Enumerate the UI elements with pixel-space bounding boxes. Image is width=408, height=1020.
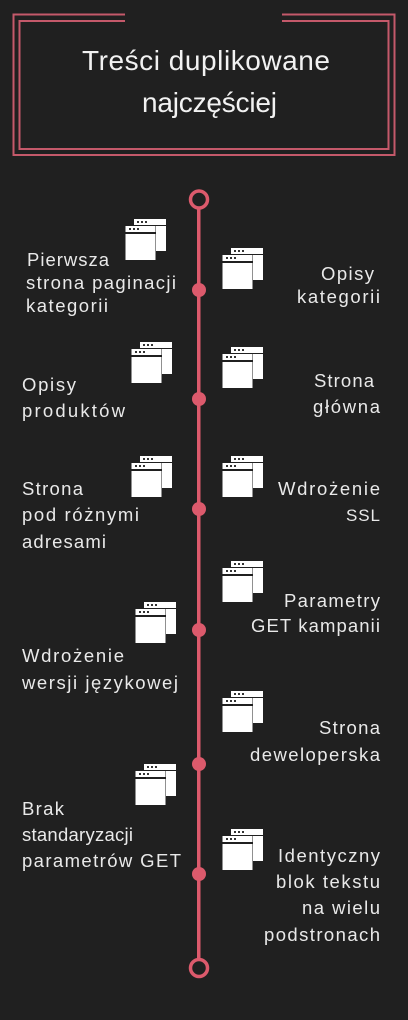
item: Pierwsza strona paginacji kategorii: Pierwsza — [27, 249, 110, 270]
item: Wdrożenie wersji językowej — [21, 602, 178, 693]
item: Opisy kategorii — [222, 248, 380, 307]
item: Opisy produktów: Opisy — [22, 374, 77, 395]
item: Identyczny blok tekstu na wielu podstronach: na wielu — [302, 897, 380, 918]
item: Pierwsza strona paginacji kategorii: strona paginacji — [26, 272, 176, 293]
item: Pierwsza strona paginacji kategorii: kategorii — [26, 295, 108, 316]
item: Strona deweloperska: Strona — [319, 717, 381, 738]
title frame — [14, 14, 394, 155]
item: Strona deweloperska: deweloperska — [250, 744, 381, 765]
item: Parametry GET kampanii — [222, 561, 381, 636]
item: Wdrożenie wersji językowej: wersji językowej — [21, 672, 178, 693]
item: Strona główna — [222, 347, 381, 417]
item: Opisy kategorii: Opisy — [321, 263, 375, 284]
item: Parametry GET kampanii: GET kampanii — [251, 615, 380, 636]
item: Pierwsza strona paginacji kategorii — [26, 219, 176, 316]
item: Wdrożenie SSL: SSL — [346, 506, 380, 525]
item: Strona pod różnymi adresami: adresami — [22, 531, 106, 552]
item: Identyczny blok tekstu na wielu podstronach: Identyczny — [278, 845, 381, 866]
item: Strona główna: główna — [313, 396, 381, 417]
item: Identyczny blok tekstu na wielu podstronach: podstronach — [264, 924, 380, 945]
title — [82, 45, 330, 118]
title: najczęściej — [142, 87, 277, 118]
item: Strona deweloperska — [222, 691, 381, 765]
item: Strona pod różnymi adresami: pod różnymi — [22, 504, 139, 525]
item: Wdrożenie SSL — [222, 456, 380, 525]
item: Identyczny blok tekstu na wielu podstronach — [222, 829, 381, 945]
item: Brak standaryzacji parametrów GET: Brak — [22, 798, 65, 819]
item: Identyczny blok tekstu na wielu podstronach: blok tekstu — [276, 871, 380, 892]
item: Opisy produktów: produktów — [22, 400, 126, 421]
item: Brak standaryzacji parametrów GET: parametrów GET — [22, 850, 181, 871]
item: Strona pod różnymi adresami: Strona — [22, 478, 84, 499]
item: Brak standaryzacji parametrów GET: standaryzacji — [22, 824, 133, 845]
item: Opisy kategorii: kategorii — [297, 286, 380, 307]
timeline — [190, 191, 208, 976]
item: Wdrożenie SSL: Wdrożenie — [278, 478, 380, 499]
item: Wdrożenie wersji językowej: Wdrożenie — [22, 645, 124, 666]
item: Parametry GET kampanii: Parametry — [284, 590, 381, 611]
item: Strona pod różnymi adresami — [22, 456, 172, 552]
item: Strona główna: Strona — [314, 370, 375, 391]
title: Treści duplikowane — [82, 45, 330, 76]
item: Opisy produktów — [22, 342, 172, 421]
item: Brak standaryzacji parametrów GET — [22, 764, 181, 871]
